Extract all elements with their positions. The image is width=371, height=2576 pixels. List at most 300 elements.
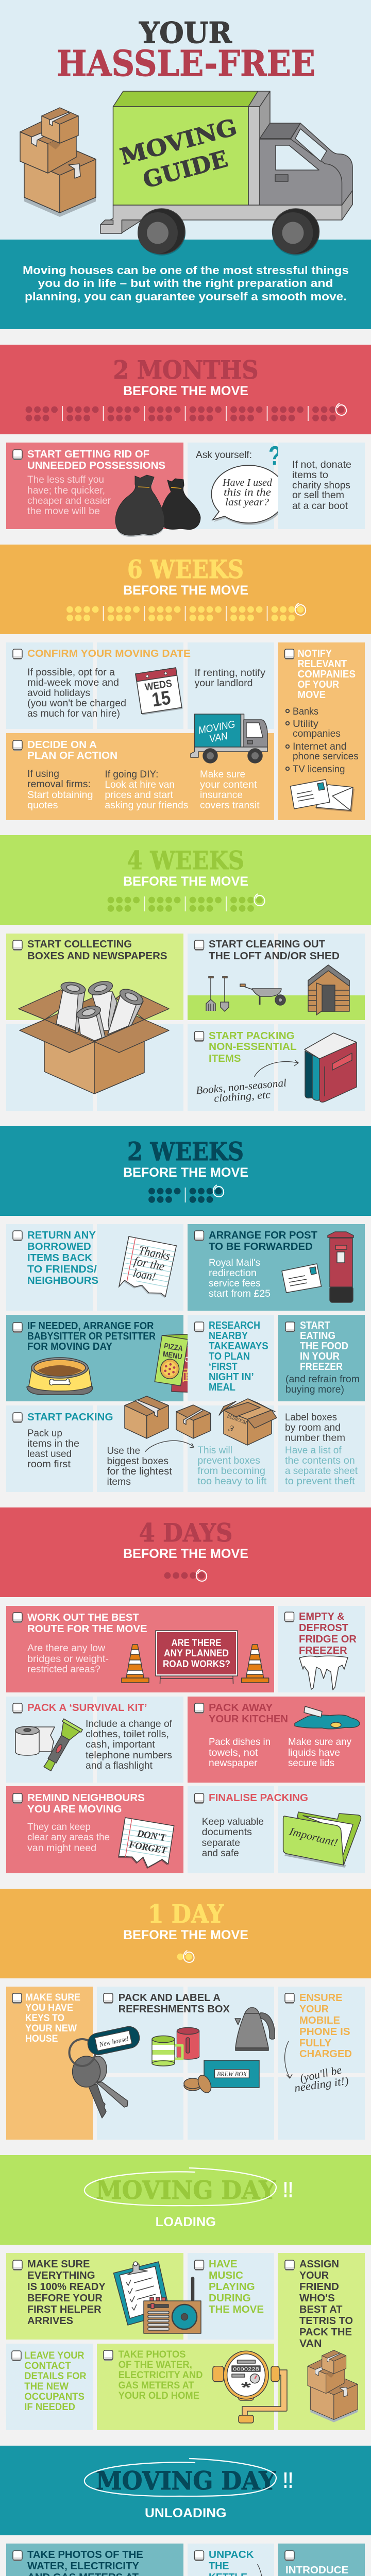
icon: torn note: for the	[133, 1255, 166, 1274]
icon: checkbox	[104, 2350, 113, 2361]
icon: rubbish bags	[115, 475, 200, 537]
text: landlord	[195, 668, 266, 689]
heading: THE MOVE	[209, 2304, 264, 2315]
heading: PACK AND LABEL A	[119, 1992, 221, 2004]
heading: START GETTING RID OF	[27, 449, 149, 460]
text block: If possible, opt for a	[27, 667, 115, 678]
icon: letters	[291, 779, 355, 812]
text block: mid-week move and	[27, 677, 119, 688]
scribble circle	[85, 2168, 276, 2206]
section header: 4 days	[0, 1507, 371, 1597]
panel: ask yourself	[188, 441, 286, 529]
icon: checkbox	[195, 1703, 204, 1714]
sign text: ROAD WORKS?	[163, 1659, 230, 1670]
text: label boxes	[285, 1412, 358, 1487]
heading: FIRST HELPER	[27, 2304, 102, 2315]
text block: telephone numbers	[86, 1750, 172, 1761]
heading	[27, 939, 167, 962]
heading	[27, 1612, 147, 1635]
icon: checkbox	[284, 649, 294, 659]
heading: NIGHT IN’	[209, 1371, 254, 1383]
header panel	[0, 0, 371, 240]
section header: 2 weeks: BEFORE THE MOVE	[123, 1165, 248, 1180]
panel: remind neighbours	[6, 1786, 183, 1873]
heading	[209, 1702, 288, 1725]
scribble circle	[85, 2459, 276, 2496]
panel: assign friend	[278, 2253, 365, 2430]
heading: ENSURE	[299, 1992, 342, 2004]
heading: EMPTY &	[299, 1611, 345, 1622]
text: prevent boxes	[197, 1445, 267, 1487]
panel: work out route	[6, 1606, 274, 1692]
heading	[299, 2259, 353, 2349]
icon: road sign	[156, 1631, 238, 1684]
heading	[299, 1992, 352, 2060]
heading: IS 100% READY	[27, 2281, 106, 2293]
icon: torn note	[118, 1236, 176, 1298]
heading	[209, 939, 340, 962]
heading: DECIDE ON A	[27, 739, 97, 751]
text block	[27, 1643, 109, 1675]
panel: plan of action	[6, 733, 274, 820]
text: removal firms: quotes	[27, 800, 58, 811]
section header: 4 days: BEFORE THE MOVE	[123, 1547, 248, 1561]
heading: RELEVANT	[298, 658, 347, 670]
text: label boxes: a separate sheet	[285, 1466, 358, 1477]
heading: OCCUPANTS	[24, 2392, 85, 2402]
text block	[27, 1428, 79, 1470]
subheading: UNLOADING	[145, 2506, 227, 2520]
text block	[27, 1822, 110, 1854]
heading: MUSIC	[209, 2270, 243, 2281]
heading: REMIND NEIGHBOURS	[27, 1792, 145, 1804]
handwritten note: needing it!)	[294, 2074, 349, 2094]
folder label: Important!	[288, 1825, 339, 1849]
countdown dots	[164, 1569, 207, 1581]
icon: checkbox	[195, 2260, 204, 2270]
text: label boxes: number them	[285, 1433, 345, 1444]
text: label boxes: Label boxes	[285, 1412, 337, 1423]
text: dishes: towels, not	[209, 1748, 258, 1758]
heading: BEFORE YOUR	[27, 2293, 103, 2304]
heading: MAKE SURE	[25, 1992, 80, 2003]
text block	[285, 1374, 360, 1395]
icon: folder	[283, 1812, 361, 1868]
text block: bridges or weight-	[27, 1654, 109, 1665]
heading: DETAILS FOR	[24, 2371, 87, 2382]
exclamation marks: !!	[283, 2468, 293, 2493]
text block: avoid holidays	[27, 688, 90, 699]
heading: ROUTE FOR THE MOVE	[27, 1623, 147, 1635]
icon: checkbox	[195, 1322, 204, 1332]
text block: restricted areas?	[27, 1664, 100, 1675]
text: removal firms: removal firms:	[27, 779, 91, 790]
van label: VAN	[208, 731, 229, 745]
heading: TETRIS TO	[299, 2315, 353, 2327]
text block: service fees	[209, 1278, 261, 1289]
arrow	[145, 1440, 194, 1452]
icon: dog bowl	[27, 1358, 93, 1395]
heading: MOVE	[298, 689, 326, 701]
countdown dots	[66, 603, 306, 621]
heading: YOUR	[299, 2270, 329, 2281]
text: insurance: insurance	[200, 790, 243, 801]
panel: unpack kettle	[188, 2544, 274, 2576]
icon: takeaway menus: 面	[181, 1367, 195, 1384]
heading	[27, 1230, 98, 1286]
section header: 4 weeks: BEFORE THE MOVE	[123, 874, 248, 889]
icon: stack of boxes	[20, 108, 96, 217]
section header: 4 weeks	[0, 835, 371, 925]
text block: The less stuff you	[27, 474, 104, 485]
text block: Are there any low	[27, 1643, 105, 1654]
countdown dots	[177, 1951, 194, 1962]
text block: least used	[27, 1449, 72, 1460]
panel: music	[188, 2253, 274, 2340]
heading: YOUR NEW	[25, 2023, 77, 2034]
heading: PHONE IS	[299, 2026, 350, 2038]
section header: 2 months: BEFORE THE MOVE	[123, 384, 248, 398]
panel: charge phone	[278, 1987, 365, 2140]
icon: checkbox	[13, 1231, 22, 1241]
icon: checkbox	[195, 940, 204, 951]
heading: TAKEAWAYS	[209, 1341, 268, 1352]
heading: YOUR KITCHEN	[209, 1714, 288, 1725]
text block: clothes, toilet rolls,	[86, 1729, 169, 1740]
text: liquids: Make sure any	[288, 1737, 351, 1748]
van label: MOVING	[197, 719, 236, 736]
icon: garden tools	[206, 976, 229, 1011]
heading: OF THE WATER,	[119, 2360, 192, 2370]
section header: 1 day: 1 DAY	[148, 1899, 224, 1929]
box label: BEDROOM	[226, 1414, 248, 1426]
text: insurance: your content	[200, 779, 257, 790]
icon: water meter	[213, 2351, 287, 2423]
heading	[27, 2259, 106, 2327]
heading: KEYS TO	[25, 2013, 64, 2024]
heading: FOR MOVING DAY	[27, 1341, 113, 1352]
text: prevent boxes: from becoming	[197, 1466, 265, 1477]
icon: books	[305, 1033, 357, 1102]
heading: PACK THE	[299, 2327, 352, 2338]
icon: takeaway menus: PIZZA	[163, 1342, 183, 1353]
icon: icicles	[299, 1656, 348, 1690]
text: biggest boxes	[107, 1446, 173, 1487]
heading: CONFIRM YOUR MOVING DATE	[27, 648, 191, 659]
heading	[24, 2350, 87, 2413]
icon: brew box: BREW BOX	[217, 2070, 247, 2078]
panel: collecting boxes	[6, 934, 183, 1111]
section header: 2 months: 2 MONTHS	[113, 355, 259, 385]
heading: FRIDGE OR	[299, 1634, 357, 1645]
panel: introduce yourself	[278, 2544, 365, 2576]
panel: survival kit	[6, 1697, 183, 1783]
icon: calendar	[136, 668, 182, 715]
icon: checkbox	[13, 450, 22, 460]
icon: checkbox	[13, 2551, 22, 2561]
text: removal firms: If using	[27, 769, 59, 779]
speech bubble: Have I used	[222, 477, 273, 488]
heading: GAS METERS AT	[119, 2380, 194, 2391]
heading	[27, 1792, 145, 1815]
heading: BOXES AND NEWSPAPERS	[27, 951, 167, 962]
text block: Royal Mail's	[209, 1258, 260, 1268]
intro text: you do in life – but with the right preparation and	[38, 277, 333, 290]
panel: research takeaways	[188, 1315, 274, 1401]
text block: have; the quicker,	[27, 485, 105, 496]
heading: START PACKING	[209, 1030, 295, 1042]
sign text: ARE THERE	[171, 1638, 222, 1649]
icon: checkbox	[13, 1703, 22, 1714]
icon: traffic cone	[242, 1645, 269, 1683]
text block: Include a change of	[86, 1719, 173, 1730]
text: insurance: Make sure	[200, 769, 245, 780]
text block: the move will be	[27, 506, 100, 517]
heading	[298, 648, 356, 701]
text block: at a car boot	[292, 501, 348, 512]
text block	[27, 474, 111, 517]
heading	[209, 2549, 254, 2576]
text block	[209, 1258, 271, 1299]
section header: 2 weeks: 2 WEEKS	[127, 1137, 244, 1166]
heading: WORK OUT THE BEST	[27, 1612, 139, 1623]
icon: takeaway menus: OK	[184, 1355, 194, 1363]
text block: cash, important	[86, 1739, 156, 1750]
text: going DIY: If going DIY:	[105, 769, 158, 780]
text: going DIY	[105, 769, 188, 811]
heading: NEARBY	[209, 1330, 248, 1342]
box label	[222, 1414, 248, 1437]
bullet list	[286, 706, 359, 775]
heading: CHARGED	[299, 2048, 352, 2060]
heading: BEST AT	[299, 2304, 342, 2315]
panel: start packing	[6, 1396, 365, 1492]
text: going DIY: prices and start	[105, 790, 174, 801]
heading: WHO'S	[299, 2293, 335, 2304]
heading: ARRANGE FOR POST	[209, 1230, 317, 1241]
handwritten note	[294, 2063, 349, 2094]
heading	[27, 449, 165, 471]
heading: PLAN OF ACTION	[27, 750, 117, 761]
text block: as much for van hire)	[27, 708, 120, 719]
heading: UNNEEDED POSSESSIONS	[27, 460, 165, 471]
section header: 2 months	[0, 345, 371, 434]
speech bubble: this in the	[224, 487, 271, 498]
section header: moving day loading: MOVING DAY	[96, 2175, 276, 2205]
heading: THE LOFT AND/OR SHED	[209, 951, 340, 962]
section header: 4 weeks: 4 WEEKS	[127, 845, 244, 875]
heading: MOBILE	[299, 2015, 340, 2026]
icon: clipboard	[113, 2262, 170, 2325]
heading: MEAL	[209, 1382, 235, 1393]
heading: VAN	[299, 2338, 322, 2349]
heading	[299, 1611, 357, 1656]
icon: checkbox	[104, 1993, 113, 2004]
section header: 6 weeks: 6 WEEKS	[127, 554, 244, 584]
icon: spilled cup	[295, 1706, 360, 1729]
heading: COMPANIES	[298, 669, 356, 680]
heading: START COLLECTING	[27, 939, 132, 950]
panel: arrange babysitter	[6, 1315, 200, 1401]
icon: checkbox	[12, 1993, 22, 2004]
icon: checkbox	[284, 1612, 294, 1622]
icon: keys	[69, 2025, 141, 2118]
heading: PACK A ‘SURVIVAL KIT’	[27, 1702, 147, 1714]
heading: THE NEW	[24, 2381, 69, 2392]
section header: 6 weeks	[0, 545, 371, 634]
arrow	[285, 2041, 292, 2078]
text: removal firms: Start obtaining	[27, 790, 93, 801]
heading: ‘FIRST	[209, 1361, 238, 1372]
icon: torn note: DON'T	[136, 1828, 167, 1844]
text block: (and refrain from	[285, 1374, 360, 1385]
text: biggest boxes: for the lightest	[107, 1466, 173, 1477]
icon: moving van	[191, 714, 267, 763]
heading: NON-ESSENTIAL	[209, 1041, 297, 1053]
panel: confirm moving date	[6, 642, 274, 729]
heading: INTRODUCE	[285, 2565, 348, 2576]
panel: donate items	[278, 443, 365, 529]
panel: photos of meters old home	[97, 2344, 287, 2430]
icon: checkbox	[13, 740, 22, 751]
icon: biscuits	[184, 2073, 214, 2095]
heading: TAKE PHOTOS	[119, 2349, 185, 2360]
icon: checkbox	[13, 940, 22, 951]
text block: charity shops	[292, 480, 350, 491]
icon: checkbox	[13, 2260, 22, 2270]
text: insurance	[200, 769, 260, 811]
icon: checkbox	[285, 2260, 294, 2270]
text: landlord: If renting, notify	[195, 668, 266, 679]
panel: return borrowed items	[6, 1224, 183, 1311]
icon: post box	[328, 1232, 353, 1302]
heading: START PACKING	[27, 1412, 113, 1423]
sign text: ANY PLANNED	[164, 1648, 229, 1659]
icon: takeaway menus: MENU	[162, 1350, 183, 1361]
heading	[209, 1230, 317, 1252]
icon: checkbox	[13, 1323, 22, 1333]
heading: YOUR OLD HOME	[119, 2391, 199, 2401]
subheading: LOADING	[156, 2215, 216, 2229]
tag label: New house!	[98, 2035, 129, 2048]
text block	[292, 460, 351, 512]
icon: flashlight	[38, 1719, 82, 1774]
arrow	[255, 1060, 298, 1077]
text: label boxes: by room and	[285, 1422, 341, 1433]
icon: shed	[308, 965, 349, 1015]
icon: question mark: ?	[268, 441, 281, 471]
heading: YOUR	[299, 2004, 329, 2015]
handwritten note: Books, non-seasonal	[195, 1076, 287, 1097]
section header: moving day loading	[0, 2155, 371, 2245]
text block: clear any areas the	[27, 1832, 110, 1843]
text block: buying more)	[285, 1384, 344, 1395]
meter asterisk: *	[241, 2379, 251, 2396]
section header: 1 day	[0, 1889, 371, 1978]
speech bubble	[211, 465, 286, 525]
bullet list: Internet and	[293, 741, 347, 752]
bullet list: phone services	[293, 751, 359, 762]
icon: checkbox	[285, 2551, 294, 2561]
text block: If not, donate	[292, 460, 351, 470]
heading	[209, 1320, 268, 1393]
text: prevent boxes: too heavy to lift	[197, 1476, 267, 1487]
heading	[119, 1992, 230, 2015]
heading: START	[300, 1320, 330, 1331]
text block: and a flashlight	[86, 1760, 153, 1771]
text: label boxes: the contents on	[285, 1455, 355, 1466]
text block: items in the	[27, 1438, 79, 1449]
icon: checkbox	[285, 1993, 294, 2004]
text block: Keep valuable	[202, 1817, 264, 1827]
heading	[209, 2259, 264, 2315]
title: HASSLE-FREE	[57, 43, 315, 84]
text: liquids	[288, 1737, 351, 1769]
heading: ELECTRICITY AND	[119, 2370, 203, 2381]
panel: loft and shed	[188, 934, 365, 1020]
intro text	[23, 264, 349, 303]
text: label boxes: to prevent theft	[285, 1476, 356, 1487]
text block: Pack up	[27, 1428, 62, 1439]
heading: FINALISE PACKING	[209, 1792, 308, 1804]
icon: torn note: FORGET	[128, 1839, 168, 1856]
text: liquids: liquids have	[288, 1748, 340, 1758]
text block	[27, 667, 126, 719]
heading	[27, 739, 117, 761]
heading: ARRIVES	[27, 2315, 73, 2327]
truck label	[117, 114, 247, 198]
text: removal firms	[27, 769, 93, 811]
heading: EATING	[300, 1330, 335, 1342]
text block	[202, 1817, 264, 1859]
icon: calendar: WEDS	[144, 678, 173, 693]
icon: radio	[144, 2277, 201, 2333]
section header: 1 day: BEFORE THE MOVE	[123, 1928, 248, 1942]
heading: IN YOUR	[300, 1351, 340, 1362]
icon: takeaway menus	[155, 1330, 200, 1393]
illustration: moving truck	[100, 91, 352, 256]
text block: separate	[202, 1838, 240, 1849]
text: label boxes: Have a list of	[285, 1445, 342, 1456]
heading: LEAVE YOUR	[24, 2350, 85, 2361]
heading: UNPACK	[209, 2549, 254, 2561]
icon: traffic cone	[122, 1645, 149, 1683]
heading: START CLEARING OUT	[209, 939, 325, 950]
text block: cheaper and easier	[27, 496, 111, 506]
heading: TO BE FORWARDED	[209, 1241, 313, 1252]
text: biggest boxes: items	[107, 1477, 131, 1487]
intro band	[0, 240, 371, 329]
heading: TO FRIENDS/	[27, 1264, 97, 1275]
heading: ITEMS BACK	[27, 1252, 93, 1264]
icon: checkbox	[195, 1793, 204, 1804]
heading: OF YOUR	[298, 679, 339, 690]
icon: postcard	[282, 1264, 322, 1293]
heading: DEFROST	[299, 1622, 348, 1634]
countdown dots	[26, 403, 346, 421]
icon: box of newspapers	[19, 979, 169, 1094]
text: prevent boxes: This will	[197, 1445, 232, 1456]
text block: and safe	[202, 1848, 239, 1859]
heading: TO PLAN	[209, 1351, 250, 1362]
speech bubble: last year?	[225, 497, 269, 508]
heading: PLAYING	[209, 2281, 255, 2293]
van label	[197, 719, 238, 747]
icon: checkbox	[195, 1231, 204, 1241]
countdown dots	[108, 894, 265, 912]
icon: stack of boxes	[308, 2350, 358, 2422]
panel: notify companies	[278, 642, 365, 820]
